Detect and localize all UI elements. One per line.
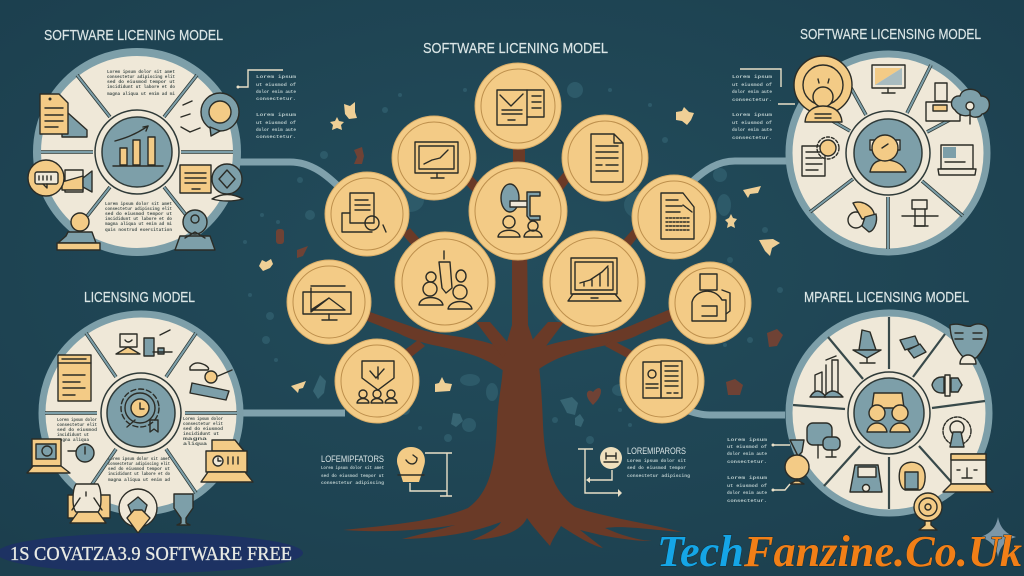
text block: bottom sector: incididunt ut labore et do (108, 471, 170, 477)
gold leaves (259, 102, 780, 393)
tree coin: large right (543, 231, 645, 333)
callout: top-right wheel notes: consectetur. (732, 97, 772, 103)
callout: bottom-right wheel notes: Lorem ipsum (727, 475, 767, 481)
text block: right sector: Lorem ipsum dolor (183, 416, 223, 422)
text block: top sector: Lorem ipsum dolor sit amet (107, 69, 175, 75)
text block: bottom sector: magna aliqua ut enim ad (108, 477, 170, 483)
panel: top-left wheel (28, 52, 243, 252)
text block: bottom sector: sed do eiusmod tempor ut (105, 211, 172, 217)
text block: top sector: incididunt ut labore et do (107, 84, 175, 90)
text block: bottom sector: incididunt ut labore et do (105, 216, 172, 222)
icon: tooth badge (950, 324, 988, 364)
icon: pedestal (902, 200, 938, 226)
text block: bottom sector: consectetur adipiscing elit (105, 206, 172, 212)
text block: top sector: magna aliqua ut enim ad mi (107, 91, 175, 97)
tree coin: top (475, 63, 561, 149)
text block: bottom sector: sed do eiusmod tempor ut (108, 466, 170, 472)
wheel base (789, 54, 987, 252)
title: bottom left: LICENSING MODEL (84, 289, 195, 306)
icon: window document (58, 355, 91, 401)
icon: monitor (872, 65, 905, 93)
icon: shield (174, 494, 193, 525)
icon: papers (900, 336, 926, 358)
callout: top-right wheel notes: Lorem ipsum (732, 112, 772, 118)
icon: printer (201, 440, 253, 482)
callout: bottom center right: Lorem ipsum dolor sit (627, 458, 686, 464)
callout: bottom center right: LOREMIPARORS (627, 446, 686, 456)
icon: monument (853, 330, 881, 363)
icon: portrait (899, 462, 925, 490)
tree coin: upper left (392, 116, 476, 200)
callout: top-right wheel notes (732, 69, 795, 141)
icon: webcam (914, 493, 942, 530)
callout: bottom-right wheel notes: consectetur. (727, 498, 767, 504)
text block: bottom sector (108, 456, 170, 483)
callout: bottom-right wheel notes: ut eiusmod of (727, 483, 767, 489)
callout: top-left wheel notes: Lorem ipsum (256, 112, 296, 118)
title: center: SOFTWARE LICENING MODEL (423, 40, 608, 57)
grey leaves (313, 375, 584, 427)
text block: right sector: aliqua (183, 441, 207, 447)
icon: document with gear (802, 137, 839, 176)
icon: speech bubble gear (181, 93, 239, 136)
title: top left: SOFTWARE LICENING MODEL (44, 27, 223, 44)
icon: trees (807, 423, 840, 458)
text block: bottom sector: magna aliqua ut enim ad mi (105, 221, 172, 227)
callout: top-left wheel notes (236, 70, 296, 140)
wheel base (42, 314, 240, 512)
text block: bottom sector: quis nostrud exercitation (105, 227, 172, 233)
icon: server and cloud (926, 83, 989, 124)
text block: left sector: magna aliqua (57, 437, 89, 443)
decoration: four-point star (980, 517, 1016, 557)
icon: bar chart (113, 126, 163, 166)
callout: top-left wheel notes: Lorem ipsum (256, 74, 296, 80)
callout: bottom center left: LOFEMIPFATORS (321, 454, 384, 464)
callout: bottom center right: consectetur adipiscing (627, 473, 690, 479)
text block: left sector: incididunt ut (57, 432, 89, 438)
icon: grey figure (175, 210, 215, 250)
icon: video bubble (28, 160, 92, 196)
text block: left sector: sed do eiusmod (57, 427, 97, 433)
logo: TechFanzine.Co.Uk: TechFanzine.Co.Uk (657, 527, 1022, 576)
callout: top-right wheel notes: consectetur. (732, 135, 772, 141)
callout: top-left wheel notes: consectetur. (256, 96, 296, 102)
callout: bottom center left: consectetur adipiscing (321, 480, 384, 486)
icon: document card (850, 465, 882, 492)
icon: central person (870, 135, 906, 172)
text block: bottom sector: consectetur adipiscing elit (108, 461, 170, 467)
branches (345, 305, 505, 372)
trunk and roots (343, 240, 682, 548)
background speckles (243, 82, 783, 444)
panel: top-right wheel (789, 54, 989, 252)
callout: bottom-right wheel notes: consectetur. (727, 459, 767, 465)
callout: top-left wheel notes: dolor enim aute (256, 127, 296, 133)
callout: bottom-right wheel notes (727, 437, 790, 504)
tree coin: lower left (287, 260, 371, 344)
text block: bottom sector: Lorem ipsum dolor sit amet (105, 201, 172, 207)
callout: top-left wheel notes: ut eiusmod of (256, 120, 296, 126)
icon: badge head (119, 489, 157, 533)
icon: globe on stand (785, 440, 809, 484)
icon: head badge (794, 56, 852, 122)
panel: bottom-right wheel (785, 313, 993, 530)
icon: laptop (938, 145, 976, 175)
title: bottom right: MPAREL LICENSING MODEL (804, 289, 969, 306)
connector pipes (240, 161, 788, 415)
callout: top-right wheel notes: ut eiusmod of (732, 82, 772, 88)
callout: bottom-right wheel notes: ut eiusmod of (727, 444, 767, 450)
text block: top sector (107, 69, 175, 97)
icon: document (40, 94, 87, 137)
callout: top-right wheel notes: dolor enim aute (732, 89, 772, 95)
text block: left sector: consectetur elit (57, 422, 97, 428)
banner: question pill (0, 533, 303, 573)
callout: top-left wheel notes: consectetur. (256, 134, 296, 140)
banner: question pill: 1S COVATZA3.9 SOFTWARE FREE (10, 544, 292, 565)
tree (343, 145, 690, 548)
text block: right sector: sed do eiusmod (183, 426, 223, 432)
callout: top-right wheel notes: ut eiusmod of (732, 120, 772, 126)
callout: bottom center left (321, 447, 452, 496)
text block: bottom sector: Lorem ipsum dolor sit amet (108, 456, 170, 462)
panel: bottom-left wheel (27, 314, 253, 533)
icon: gears and gloves (848, 202, 877, 232)
callout: bottom center left: sed do eiusmod tempor ut (321, 473, 384, 479)
tree coin: center (469, 162, 567, 260)
callout: bottom center right: sed do eiusmod tempor (627, 465, 686, 471)
text block: top sector: sed do eiusmod tempor ut (107, 79, 175, 85)
tree coin: bottom left (335, 339, 419, 423)
text block: right sector: magna (183, 437, 207, 442)
icon: monitor and building (116, 330, 172, 356)
icon: gear clock (121, 389, 159, 432)
callout: bottom-right wheel notes: Lorem ipsum (727, 437, 767, 443)
icon: badge (600, 447, 622, 469)
icon: gold laptop (943, 454, 993, 492)
callout: top-left wheel notes: dolor enim aute (256, 89, 296, 95)
icon: bearing (932, 375, 962, 396)
tree coin: far right (669, 262, 751, 344)
text block: bottom sector (105, 201, 172, 233)
text block: right sector: incididunt ut (183, 431, 219, 437)
tree coin: bottom right (620, 339, 704, 423)
tree coin: large left (395, 232, 495, 332)
icon: laptop and dial (27, 439, 94, 473)
text block: left sector: Lorem ipsum dolor (57, 417, 97, 423)
icon: clipboard and globe (180, 164, 243, 201)
wheel base (789, 313, 989, 513)
tree coin: upper right (562, 115, 648, 201)
wheel base (37, 52, 237, 252)
callout: bottom-right wheel notes: dolor enim aute (727, 451, 767, 457)
callout: bottom center left: Lorem ipsum dolor sit amet (321, 465, 384, 471)
tree coin: middle right (632, 175, 716, 259)
icon: wheel person (943, 417, 971, 447)
callout: bottom center right (578, 446, 690, 497)
icon: person with base (57, 213, 100, 250)
text block: right sector (183, 416, 223, 447)
icon: cloud and box (190, 363, 232, 400)
text block: top sector: consectetur adipiscing elit (107, 74, 175, 80)
text block: left sector (57, 417, 97, 443)
callout: top-left wheel notes: ut eiusmod of (256, 82, 296, 88)
icon: chart city (810, 356, 843, 397)
red leaves (276, 147, 783, 405)
icon: bottom person (68, 484, 110, 523)
icon: bulb (397, 447, 425, 482)
callout: bottom-right wheel notes: dolor enim aute (727, 490, 767, 496)
icon: central figures (867, 393, 910, 432)
callout: top-right wheel notes: dolor enim aute (732, 127, 772, 133)
text block: right sector: consectetur elit (183, 421, 223, 427)
title: top right: SOFTWARE LICENSING MODEL (800, 26, 981, 43)
callout: top-right wheel notes: Lorem ipsum (732, 74, 772, 80)
tree coin: middle left (325, 172, 409, 256)
